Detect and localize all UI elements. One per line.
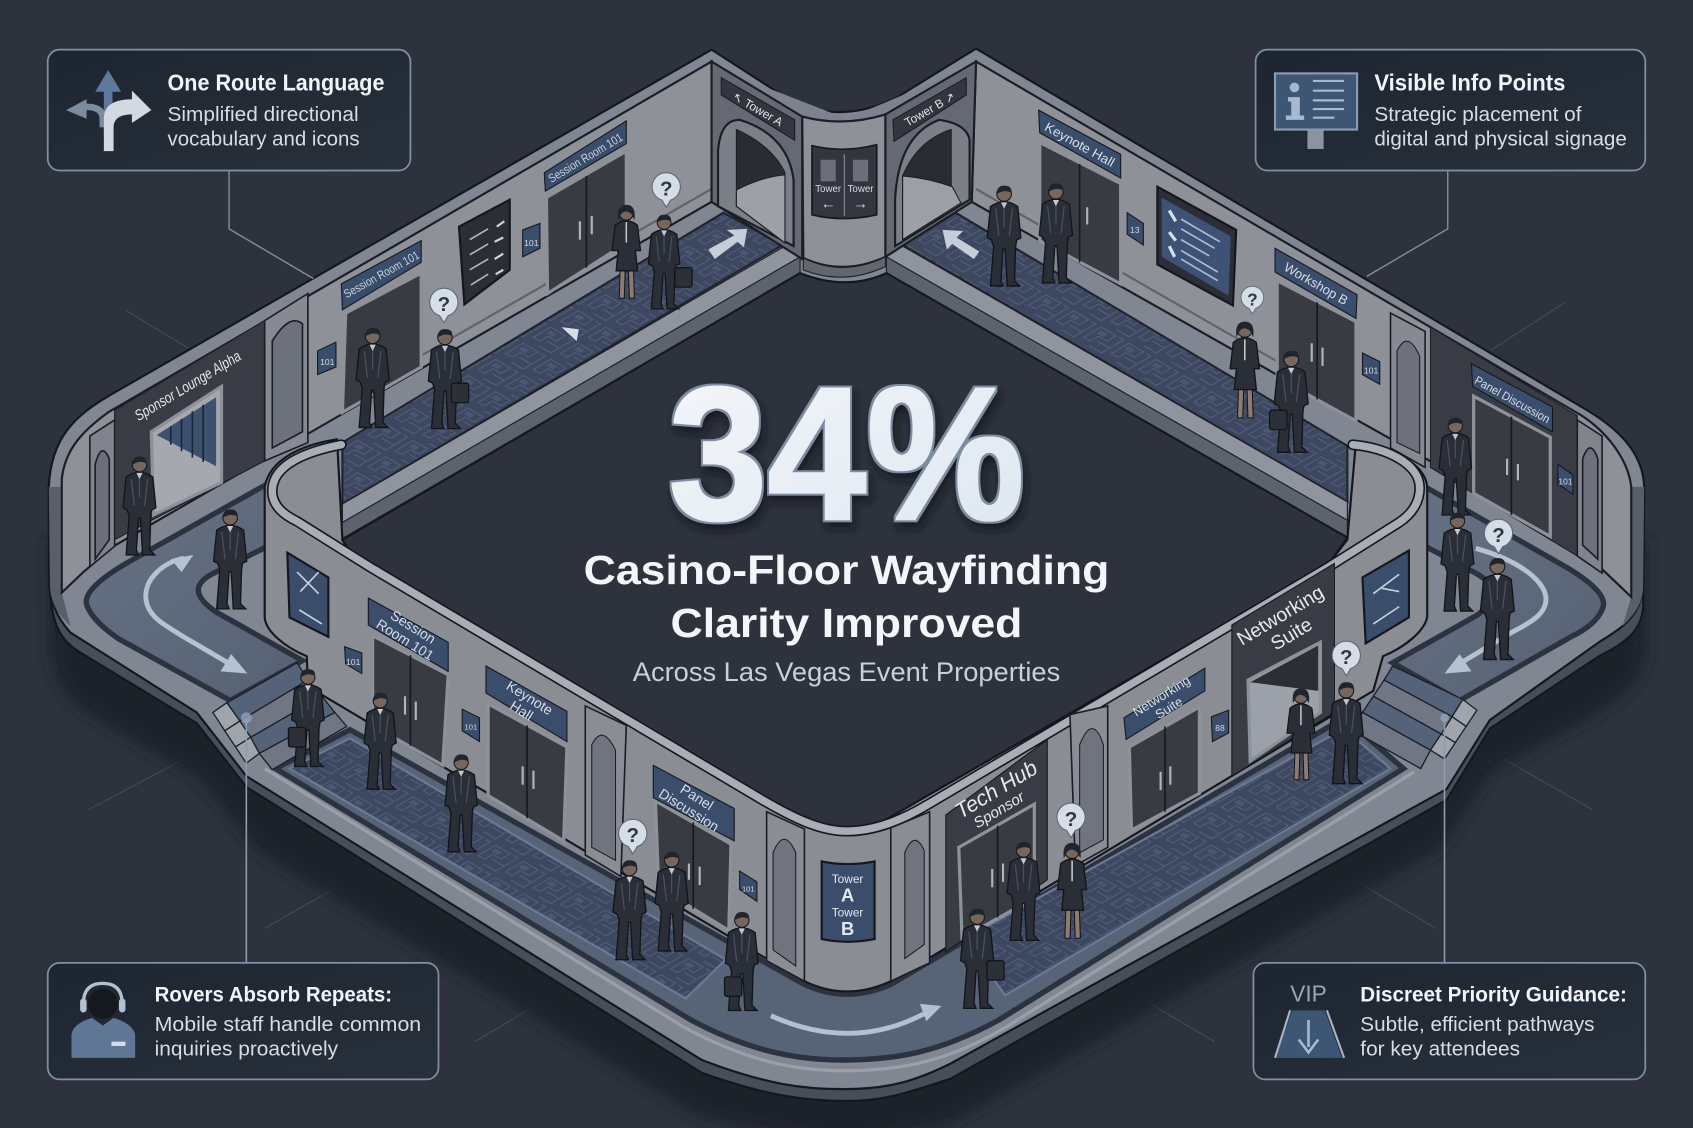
sign: Tower A archway: ↖ Tower A: [730, 89, 785, 129]
ring inner floor: [62, 65, 1631, 597]
description: digital and physical signage: [1374, 128, 1627, 151]
question bubbles: ?: [1247, 289, 1258, 309]
headline line 2: Clarity Improved: [671, 600, 1022, 646]
plaque 101: 101: [524, 238, 539, 248]
sign: Tower A archway: [718, 78, 795, 246]
carpet: top-left corridor: [342, 213, 783, 504]
door and sign: Panel Discussion (lower): Panel: [678, 781, 716, 813]
back wall: top-left: [62, 62, 712, 593]
sign: Tower A Tower B: Tower: [832, 872, 863, 886]
door and sign: Panel Discussion (lower): Discussion: [656, 785, 722, 835]
networking suite sponsor panel: Suite: [1267, 614, 1316, 655]
floor arrow: right loop: [1445, 548, 1546, 674]
left pillar: [90, 420, 115, 567]
description: vocabulary and icons: [168, 128, 360, 151]
pillar niche: lower left: [585, 706, 626, 876]
outer end caps: [49, 487, 1644, 626]
carpet: bottom-right corridor: [964, 729, 1391, 995]
door and sign: Networking Suite: Suite: [1152, 694, 1185, 722]
floor arrow: left loop: [146, 555, 247, 674]
description: inquiries proactively: [155, 1038, 339, 1061]
tech hub sponsor panel: Tech Hub: [950, 755, 1042, 824]
plaque 101: [318, 342, 336, 375]
bottom floor trim: [265, 769, 1414, 1071]
tech hub sponsor panel: [946, 739, 1047, 952]
door and sign: Panel Discussion (lower): [653, 765, 734, 930]
briefcases: [288, 268, 1287, 996]
question bubbles: ?: [1340, 646, 1353, 669]
sign: central tower directory: Tower: [848, 184, 874, 195]
pillar niche: centre right: [891, 812, 930, 981]
left loop floor: [86, 484, 302, 701]
floor arrow: top-left corridor: [708, 229, 747, 259]
corridor ledge: top-left: [340, 246, 800, 540]
left end arch niche: [95, 451, 109, 559]
sign: Tower A Tower B: [822, 861, 875, 942]
heading: Discreet Priority Guidance:: [1360, 982, 1627, 1007]
lower-left sign panel: [287, 553, 328, 637]
plaque: [1211, 710, 1229, 742]
panel: Discreet Priority Guidance: [1253, 963, 1645, 1079]
networking suite sponsor panel: Networking: [1233, 581, 1328, 650]
connector: route language: [229, 171, 313, 278]
carpet: top-right corridor: [903, 213, 1347, 502]
directory board: [459, 200, 510, 304]
sign: central tower directory: →: [853, 195, 868, 212]
networking suite sponsor panel: [1232, 563, 1339, 776]
panel: Rovers Absorb Repeats: [48, 963, 438, 1079]
big stat: 34%: 34%: [668, 348, 1025, 560]
plaque 101: 101: [1364, 365, 1378, 375]
carpet: bottom-left corridor: [290, 738, 726, 998]
headline line 1: Casino-Floor Wayfinding: [584, 547, 1109, 593]
right pillar with arch niche: [1577, 420, 1602, 573]
structure shadow: [49, 540, 1646, 1128]
stairs: left: [213, 663, 347, 770]
connector: info points: [1367, 171, 1448, 276]
pillar niche: left: [265, 294, 308, 461]
question bubbles: ?: [660, 177, 673, 200]
plaque 101: [1558, 464, 1573, 494]
pillar niche: lower centre: [767, 812, 804, 981]
tech hub sponsor panel: Sponsor: [971, 788, 1028, 832]
icon: info monitor: [1275, 73, 1357, 149]
question bubbles: [430, 173, 1513, 854]
door and sign: Panel Discussion (upper): [1471, 364, 1553, 536]
description: for key attendees: [1360, 1038, 1520, 1061]
plaque 101: 101: [320, 357, 335, 367]
door and sign: Keynote Hall (lower): Keynote: [504, 677, 556, 718]
connector: rovers: [241, 712, 252, 963]
plaque: 101: [742, 885, 755, 894]
heading: Visible Info Points: [1374, 70, 1565, 96]
plaque: [1127, 213, 1143, 245]
plaque 101: [1362, 353, 1380, 384]
plaque: 13: [1130, 225, 1140, 235]
question bubbles: ?: [1492, 524, 1505, 547]
right loop floor: [1393, 487, 1604, 701]
sign: central tower directory: Tower: [815, 184, 842, 195]
door and sign: Session Room 101 (far): Session Room 101: [546, 130, 625, 186]
icon: VIP route: VIP: [1290, 981, 1327, 1007]
door and sign: Keynote Hall (upper): [1039, 110, 1121, 284]
corridor ledge: top-right: [886, 246, 1347, 538]
floor arrow: bottom path: [771, 1004, 941, 1033]
subtitle: Across Las Vegas Event Properties: [633, 657, 1060, 687]
door and sign: Keynote Hall (upper): Keynote Hall: [1042, 119, 1117, 170]
back wall: top-right: [972, 62, 1631, 597]
people: [123, 183, 1514, 1010]
door and sign: Workshop B: Workshop B: [1282, 259, 1351, 308]
door and sign: Networking Suite: Networking: [1130, 672, 1193, 719]
door and sign: Panel Discussion (upper): Panel Discussion: [1472, 373, 1553, 426]
door and sign: Session Room 101 (lower): Session: [388, 607, 439, 647]
icon: VIP route: [1275, 981, 1344, 1058]
pillar niche: upper right: [1391, 313, 1425, 467]
plaque 101: [345, 647, 362, 674]
central curved wall: [802, 114, 885, 277]
plaque: [740, 871, 757, 901]
lower-right sign panel: [1362, 551, 1409, 643]
door and sign: Keynote Hall (lower): Hall: [507, 697, 536, 724]
door and sign: Session Room 101 (upper): [341, 241, 422, 412]
plaque 101: [523, 223, 540, 257]
icon: staff with headset: [71, 983, 135, 1058]
door and sign: Keynote Hall (lower): [486, 666, 567, 841]
arch niche: [1397, 341, 1420, 453]
plaque 101: 101: [1558, 477, 1573, 487]
sign: Tower A Tower B: A: [841, 884, 854, 905]
description: Mobile staff handle common: [155, 1013, 421, 1036]
sign: Tower A Tower B: Tower: [832, 905, 863, 919]
plaque 101: 101: [346, 657, 361, 667]
island wall rim: [272, 445, 1420, 831]
sign: central tower directory: [812, 145, 877, 219]
description: Subtle, efficient pathways: [1360, 1013, 1595, 1036]
door and sign: Session Room 101 (lower): Room 101: [374, 616, 437, 664]
sign: central tower directory: ←: [821, 195, 836, 212]
connector: priority guidance: [1440, 714, 1449, 963]
sponsor lounge alpha panel: Sponsor Lounge Alpha: [132, 348, 244, 425]
door and sign: Session Room 101 (upper): Session Room 101: [341, 248, 422, 301]
description: Simplified directional: [168, 103, 359, 126]
panel: One Route Language: [48, 50, 410, 171]
plaque: [462, 709, 479, 742]
sign: Tower A Tower B: B: [841, 918, 854, 939]
panel: Visible Info Points: [1256, 50, 1645, 171]
question bubbles: ?: [627, 824, 639, 847]
sign: Tower B archway: Tower B ↗: [902, 89, 958, 129]
sign: Tower B archway: [893, 78, 970, 246]
pillar niche: right of tech hub: [1070, 706, 1108, 866]
central dark floor: [342, 273, 1347, 828]
question bubbles: ?: [1065, 808, 1077, 831]
question bubbles: ?: [438, 293, 450, 316]
floor arrow: top-right corridor: [943, 230, 979, 259]
plaque: 88: [1215, 723, 1225, 733]
bottom corridor floor: [275, 718, 1403, 1060]
door and sign: Session Room 101 (lower): [368, 598, 448, 765]
plaque: 101: [465, 723, 477, 732]
heading: Rovers Absorb Repeats:: [155, 982, 392, 1007]
door and sign: Session Room 101 (far): [544, 121, 626, 294]
digital wayfinding screen: [1157, 187, 1236, 305]
sponsor lounge alpha panel: [115, 321, 265, 540]
inner lower walls: [265, 439, 1427, 991]
floor marker: [562, 327, 579, 341]
description: Strategic placement of: [1374, 103, 1582, 126]
door and sign: Workshop B: [1275, 248, 1357, 421]
icon: route arrows: [66, 70, 151, 151]
tower alcove walls: [712, 62, 976, 259]
door and sign: Networking Suite: [1124, 668, 1205, 830]
heading: One Route Language: [168, 70, 385, 96]
stairs: right: [1353, 666, 1477, 769]
